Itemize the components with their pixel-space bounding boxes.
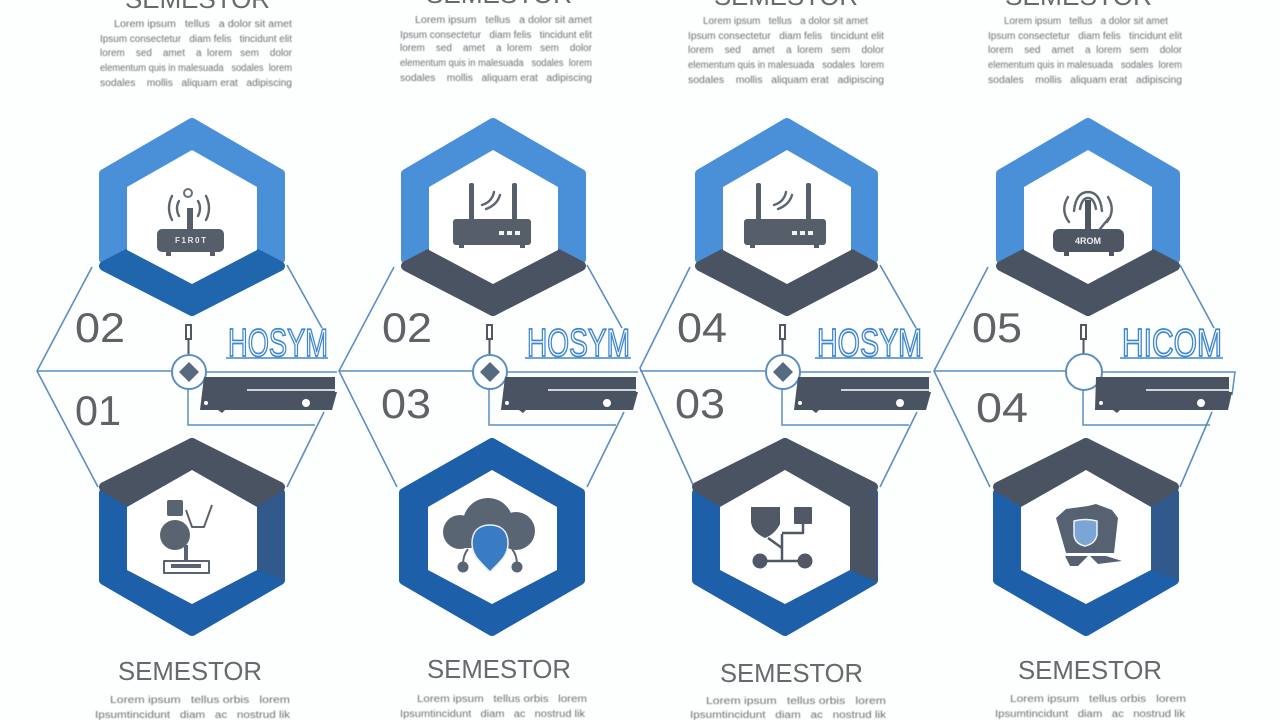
column 1 bottom: heading and text: SEMESTOR — [118, 656, 262, 686]
column 3 top: heading and text: elementum quis in malesuada sodales lorem — [688, 60, 884, 71]
column 4 top: heading and text: Lorem ipsum tellus a dolor sit amet — [1004, 16, 1168, 27]
column 3 bottom: heading and text: SEMESTOR — [720, 658, 863, 688]
icon: cloud with location drop — [443, 498, 535, 572]
column 1 top: heading and text — [100, 0, 293, 89]
column 2 top: heading and text: Lorem ipsum tellus a dolor sit amet — [415, 15, 592, 26]
hexagon: column 4 bottom, shield — [998, 443, 1178, 631]
middle band: column 2 numbers and device — [381, 304, 638, 427]
column 1 top: heading and text: elementum quis in malesuada sodales lorem — [100, 63, 292, 74]
middle band: column 3 numbers and device — [675, 304, 931, 427]
column 3 bottom: heading and text — [690, 658, 887, 720]
antenna pin — [1081, 325, 1086, 354]
column 3 bottom: heading and text: Lorem ipsum tellus orbis lorem — [706, 696, 886, 707]
middle band: column 2 numbers and device: 03 — [381, 380, 431, 427]
column 2 bottom: heading and text: Ipsumtincidunt diam ac nostrud lik — [400, 709, 586, 720]
icon: router with single antenna: F1R0T — [175, 236, 206, 245]
label: blue wordmark: HOSYM — [228, 322, 328, 365]
hexagon: column 1 top, router — [104, 123, 280, 311]
column 3 top: heading and text: sodales mollis aliquam erat adipiscing — [688, 75, 884, 86]
column 3 top: heading and text: Lorem ipsum tellus a dolor sit amet — [703, 16, 868, 27]
middle band: column 1 numbers and device: 02 — [75, 304, 125, 351]
column 2 top: heading and text — [400, 0, 593, 84]
column 2 top: heading and text: sodales mollis aliquam erat adipiscing — [400, 73, 592, 84]
hexagon: column 3 top, router — [700, 123, 873, 311]
column 4 bottom: heading and text: SEMESTOR — [1018, 655, 1162, 685]
middle band: column 4 numbers and device — [972, 304, 1235, 431]
connector lines: hexagon outlines behind all columns — [37, 265, 1214, 487]
node: circle with diamond — [766, 355, 800, 389]
device: dark server bar — [489, 372, 638, 425]
column 1 top: heading and text: Lorem ipsum tellus a dolor sit amet — [114, 19, 292, 30]
column 2 top: heading and text: lorem sed amet a lorem sem dolor — [400, 43, 593, 54]
hexagon: column 2 top, router — [406, 123, 581, 311]
column 2 bottom: heading and text: SEMESTOR — [427, 654, 571, 684]
icon: router with two antennas — [744, 183, 826, 248]
icon: router with signal waves — [1053, 192, 1124, 256]
middle band: column 2 numbers and device: 02 — [382, 304, 432, 351]
label: blue wordmark: HICOM — [1122, 322, 1222, 365]
icon: router with single antenna — [157, 189, 224, 256]
column 3 top: heading and text: lorem sed amet a lorem sem dolor — [688, 45, 885, 56]
column 4 top: heading and text: Ipsum consectetur diam felis tincidunt elit — [988, 31, 1182, 42]
icon: shield on rock — [1056, 504, 1122, 566]
column 4 top: heading and text: elementum quis in malesuada sodales lorem — [988, 60, 1182, 71]
device: dark server bar — [1083, 372, 1235, 425]
hexagon: column 2 bottom, cloud — [404, 443, 580, 631]
column 2 top: heading and text: Ipsum consectetur diam felis tincidunt elit — [400, 30, 592, 41]
column 3 top: heading and text — [688, 0, 885, 86]
hexagon: column 1 bottom, user and device — [104, 443, 284, 631]
column 2 bottom: heading and text — [400, 654, 587, 720]
hexagon: column 4 top, router — [1001, 123, 1175, 311]
middle band: column 4 numbers and device: 05 — [972, 304, 1022, 351]
antenna pin — [186, 325, 191, 354]
column 4 top: heading and text: sodales mollis aliquam erat adipiscing — [988, 75, 1182, 86]
column 4 top: heading and text — [988, 0, 1183, 86]
icon: network tree — [751, 507, 812, 568]
icon: router with signal waves: 4ROM — [1075, 236, 1101, 246]
column 4 bottom: heading and text: Ipsumtincidunt diam ac nostrud lik — [995, 709, 1186, 720]
icon: router with two antennas — [453, 183, 531, 248]
middle band: column 4 numbers and device: 04 — [976, 384, 1028, 431]
middle band: column 1 numbers and device — [75, 304, 337, 434]
column 4 top: heading and text: lorem sed amet a lorem sem dolor — [988, 45, 1183, 56]
middle band: column 3 numbers and device: 04 — [677, 304, 727, 351]
middle band: column 1 numbers and device: 01 — [75, 387, 121, 434]
node: circle with diamond — [172, 355, 206, 389]
middle band: column 3 numbers and device: 03 — [675, 380, 725, 427]
label: blue wordmark — [226, 322, 328, 365]
node: circle with diamond — [473, 355, 507, 389]
antenna pin — [487, 325, 492, 354]
column 2 top: heading and text: elementum quis in malesuada sodales lorem — [400, 58, 592, 69]
label: blue wordmark: HOSYM — [817, 322, 922, 365]
device: dark server bar — [782, 372, 931, 425]
column 1 top: heading and text: lorem sed amet a lorem sem dolor — [100, 48, 293, 59]
hexagon: column 3 bottom, network tree — [697, 443, 877, 631]
antenna pin — [780, 325, 785, 354]
device: dark server bar — [188, 372, 337, 425]
label: blue wordmark: HOSYM — [527, 322, 630, 365]
column 1 top: heading and text: Ipsum consectetur diam felis tincidunt elit — [100, 34, 292, 45]
icon: user and device — [160, 500, 212, 573]
node: empty circle — [1066, 354, 1102, 390]
column 1 top: heading and text: sodales mollis aliquam erat adipiscing — [100, 78, 292, 89]
column 4 bottom: heading and text: Lorem ipsum tellus orbis lorem — [1010, 694, 1186, 705]
column 1 bottom: heading and text — [95, 656, 291, 720]
column 3 top: heading and text: Ipsum consectetur diam felis tincidunt elit — [688, 31, 884, 42]
column 2 bottom: heading and text: Lorem ipsum tellus orbis lorem — [417, 694, 587, 705]
column 1 bottom: heading and text: Lorem ipsum tellus orbis lorem — [110, 695, 290, 706]
column 4 bottom: heading and text — [995, 655, 1186, 720]
